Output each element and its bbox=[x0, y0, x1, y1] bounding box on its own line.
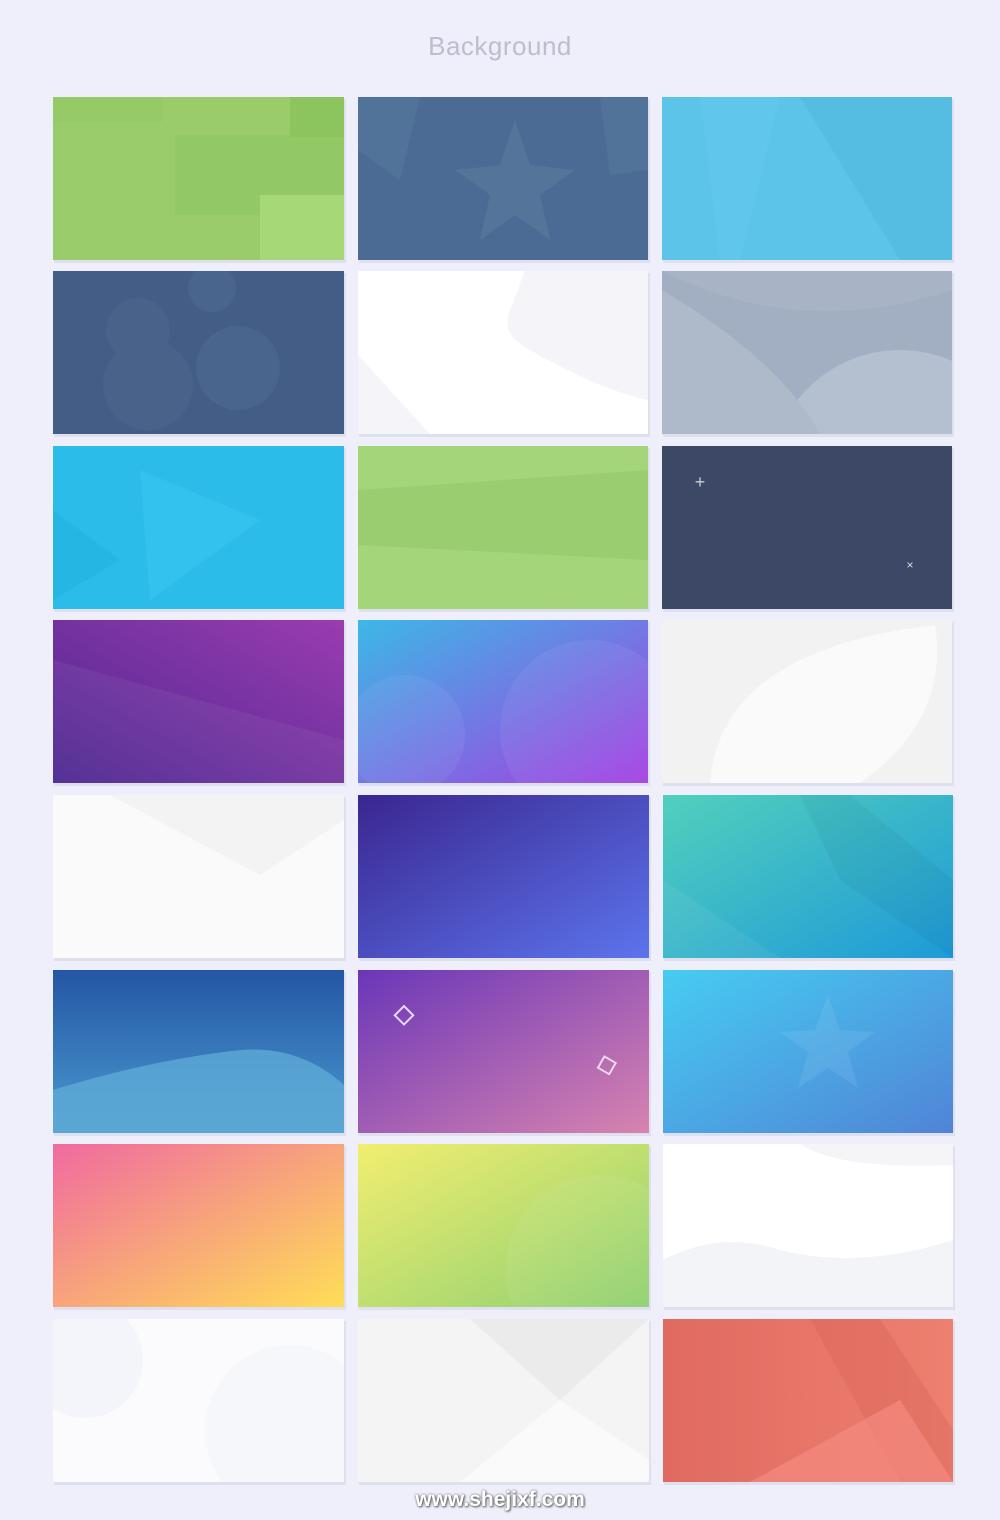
card: coral stripes bbox=[663, 1319, 953, 1482]
card: light gray arc bbox=[663, 622, 952, 783]
card: teal gradient bbox=[663, 795, 953, 958]
card: light green stripes bbox=[358, 446, 648, 609]
card: blue-purple gradient bbox=[358, 620, 648, 783]
card: blue stars bbox=[358, 97, 648, 260]
watermark: www.shejixf.com bbox=[415, 1488, 585, 1511]
card: light gray X bbox=[359, 1319, 649, 1482]
card: indigo grid bbox=[358, 795, 649, 958]
card: white circles bbox=[53, 1319, 344, 1482]
card: gray arcs bbox=[662, 271, 952, 434]
card: dark navy with marks: × bbox=[906, 558, 914, 572]
card: green blocks bbox=[53, 97, 344, 260]
card: blue stars gradient bbox=[663, 970, 953, 1133]
card: white wave bottom bbox=[663, 1144, 953, 1307]
card: cyan triangles bbox=[53, 446, 344, 609]
card: pink-yellow gradient bbox=[53, 1144, 344, 1307]
card: white wave bbox=[358, 271, 648, 434]
card: purple-pink diamonds bbox=[358, 970, 649, 1133]
card: dark navy with marks bbox=[662, 446, 952, 609]
card: dark navy with marks: + bbox=[695, 472, 705, 492]
title: Background bbox=[428, 31, 572, 61]
card: purple gradient bbox=[53, 620, 344, 783]
card: white angles bbox=[53, 795, 344, 958]
card: yellow-green gradient bbox=[358, 1144, 649, 1307]
card: sky blue bbox=[662, 97, 952, 260]
card: navy circles bbox=[53, 271, 344, 434]
card: blue waves bbox=[53, 970, 344, 1133]
